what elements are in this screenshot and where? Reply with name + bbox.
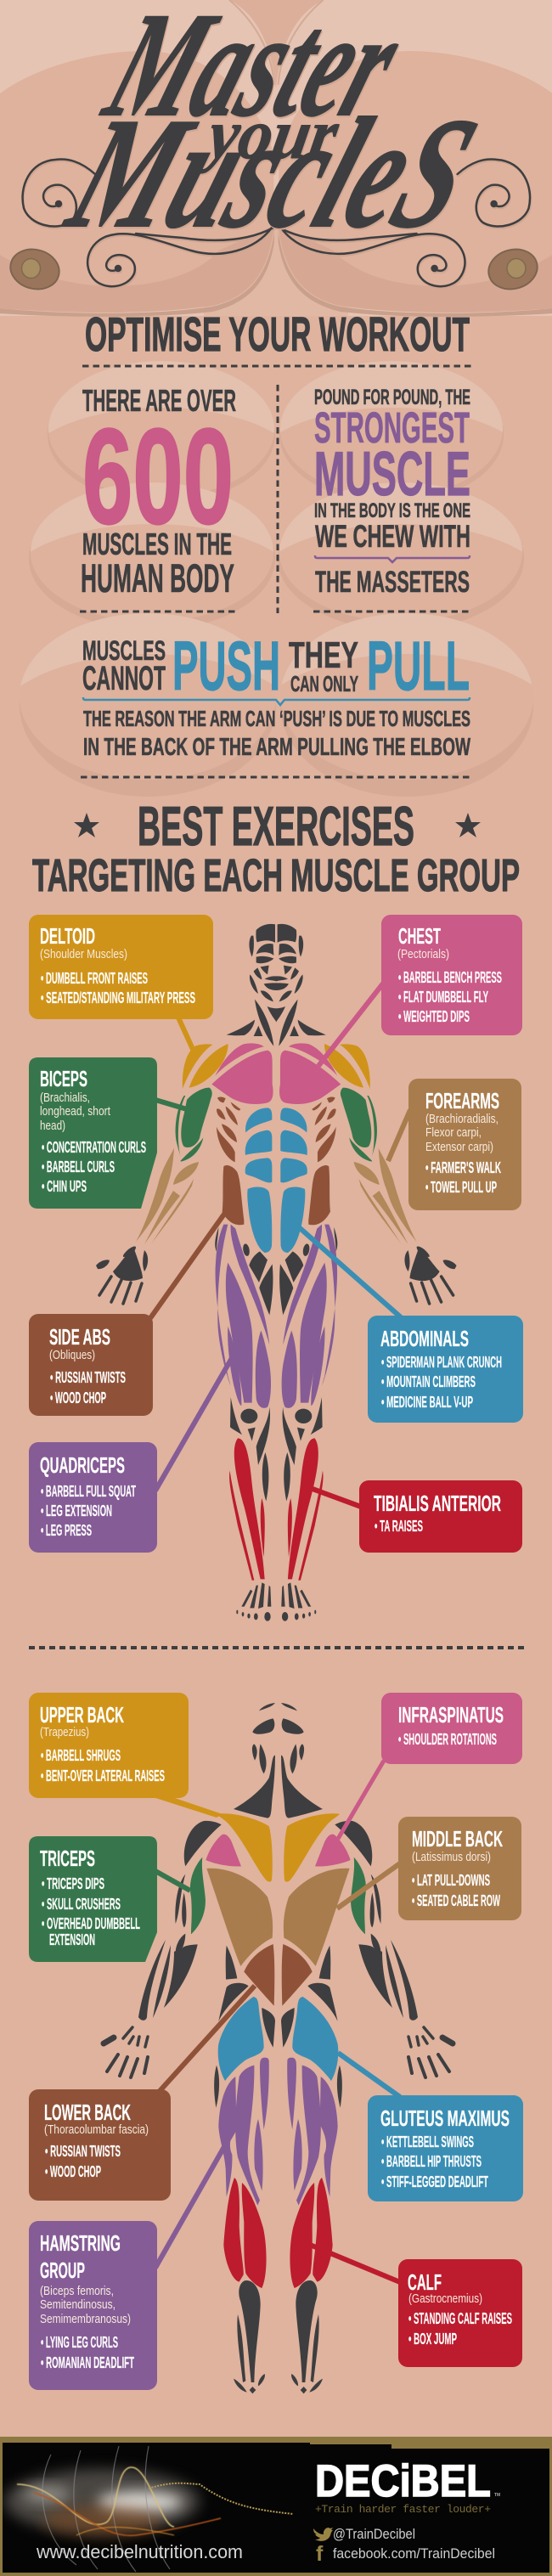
panel: deltoid: • DUMBELL FRONT RAISES (41, 970, 148, 987)
panel: biceps: longhead, short (40, 1104, 111, 1119)
fact: push and pull: CAN ONLY (290, 671, 358, 696)
panel: lower back: • RUSSIAN TWISTS (45, 2143, 121, 2160)
panel: forearms: Flexor carpi, (425, 1125, 482, 1140)
panel: chest: • WEIGHTED DIPS (398, 1008, 470, 1025)
panel: quadriceps: • LEG PRESS (41, 1522, 92, 1539)
panel: hamstring group: HAMSTRING (40, 2230, 121, 2256)
panel: upper back: (Trapezius) (40, 1725, 89, 1739)
panel: middle back (337, 1817, 521, 1920)
fact: push and pull: THEY (289, 634, 358, 676)
icon: facebook: f (316, 2542, 324, 2566)
fact: push and pull: PUSH (172, 628, 280, 705)
fact: strongest muscle (314, 386, 470, 599)
divider (29, 1646, 524, 1649)
panel: biceps (29, 1057, 187, 1209)
panel: hamstring group: Semitendinosus, (40, 2297, 115, 2312)
title (48, 0, 496, 261)
panel: chest (318, 915, 522, 1066)
chest illustration background (0, 0, 552, 317)
bubbles behind facts (0, 361, 552, 820)
panel: quadriceps: • LEG EXTENSION (41, 1502, 112, 1519)
panel: gluteus maximus: • KETTLEBELL SWINGS (381, 2134, 474, 2150)
panel: triceps: TRICEPS (40, 1846, 95, 1871)
fact: 600 muscles: 600 (82, 400, 234, 552)
icon: twitter bird (313, 2528, 333, 2541)
panel: lower back: (Thoracolumbar fascia) (44, 2122, 149, 2137)
panel: biceps: • BARBELL CURLS (42, 1158, 115, 1175)
panel: abdominals: • MOUNTAIN CLIMBERS (381, 1373, 476, 1390)
panel: biceps: BICEPS (40, 1066, 87, 1091)
panel: abdominals: • MEDICINE BALL V-UP (381, 1394, 473, 1411)
panel: deltoid: DELTOID (40, 923, 95, 949)
back body figure (104, 1703, 453, 2393)
panel: middle back: (Latissimus dorsi) (412, 1850, 491, 1864)
title: your (195, 96, 345, 174)
footer: facebook.com/TrainDecibel (333, 2545, 495, 2562)
fact: 600 muscles (81, 383, 236, 600)
fact: 600 muscles: THERE ARE OVER (82, 383, 236, 418)
panel: biceps: • CHIN UPS (42, 1178, 87, 1195)
panel: calf: CALF (408, 2269, 442, 2295)
panel: upper back: UPPER BACK (40, 1702, 124, 1728)
panel: tibialis anterior: • TA RAISES (375, 1518, 423, 1535)
footer: @TrainDecibel (333, 2526, 415, 2542)
fact: push and pull: MUSCLES (82, 635, 166, 666)
panel: hamstring group: • LYING LEG CURLS (41, 2334, 118, 2351)
panel: forearms: (Brachioradialis, (425, 1112, 498, 1126)
panel: hamstring group: GROUP (40, 2258, 85, 2283)
panel: side abs: SIDE ABS (49, 1324, 110, 1350)
fact: 600 muscles: HUMAN BODY (81, 555, 234, 600)
panel: quadriceps: QUADRICEPS (40, 1452, 125, 1478)
fact: 600 muscles: MUSCLES IN THE (82, 527, 232, 561)
panel: deltoid: (Shoulder Muscles) (40, 947, 127, 961)
fact: push and pull (82, 628, 470, 761)
panel: lower back (29, 1986, 255, 2201)
panel: triceps: • SKULL CRUSHERS (42, 1896, 121, 1913)
panel: triceps (29, 1836, 190, 1962)
icon: star left (74, 813, 99, 837)
panel: upper back: • BARBELL SHRUGS (41, 1747, 121, 1764)
panel: hamstring group (29, 2126, 236, 2390)
nipple right (484, 244, 542, 295)
panel: quadriceps (29, 1352, 235, 1553)
panel: side abs: • RUSSIAN TWISTS (50, 1369, 126, 1386)
panel: forearms: FOREARMS (425, 1088, 499, 1113)
panel: infraspinatus (338, 1693, 522, 1839)
panel: triceps: • OVERHEAD DUMBBELL (42, 1915, 140, 1932)
panel: upper back (29, 1693, 222, 1818)
footer: +Train harder faster louder+ (315, 2503, 491, 2516)
panel: chest: (Pectorials) (397, 947, 449, 961)
panel: calf: (Gastrocnemius) (408, 2291, 482, 2306)
panel: side abs: • WOOD CHOP (50, 1389, 106, 1406)
panel: calf: • BOX JUMP (408, 2331, 457, 2348)
title flourishes (23, 160, 530, 286)
icon: star right (455, 813, 481, 837)
panel: lower back: LOWER BACK (44, 2100, 131, 2125)
panel: side abs: (Obliques) (49, 1348, 95, 1362)
fact: push and pull: CANNOT (82, 660, 166, 697)
panel: chest: CHEST (398, 923, 441, 949)
panel: calf (310, 2245, 522, 2367)
panel: triceps: EXTENSION (49, 1931, 95, 1948)
panel: side abs (29, 1213, 225, 1416)
nipple left (6, 244, 64, 295)
panel: biceps: • CONCENTRATION CURLS (42, 1139, 146, 1156)
panel: deltoid: • SEATED/STANDING MILITARY PRESS (41, 989, 195, 1006)
panel: lower back: • WOOD CHOP (45, 2163, 101, 2180)
abstract sound wave art (4, 2446, 293, 2572)
footer: www.decibelnutrition.com (36, 2541, 243, 2562)
panel: triceps: • TRICEPS DIPS (42, 1875, 104, 1892)
panel: abdominals (299, 1227, 523, 1423)
panel: tibialis anterior (313, 1480, 522, 1553)
heading: best exercises (32, 795, 520, 901)
panel: forearms (388, 1079, 521, 1210)
panel: biceps: head) (40, 1119, 65, 1133)
panel: hamstring group: Semimembranosus) (40, 2312, 131, 2326)
panel: hamstring group: (Biceps femoris, (40, 2284, 114, 2298)
footer: DECiBEL (315, 2456, 491, 2506)
panel: forearms: Extensor carpi) (425, 1140, 493, 1154)
panel: deltoid (29, 915, 213, 1055)
panel: upper back: • BENT-OVER LATERAL RAISES (41, 1767, 165, 1784)
panel: quadriceps: • BARBELL FULL SQUAT (41, 1483, 136, 1500)
panel: gluteus maximus (338, 2053, 523, 2201)
panel: biceps: (Brachialis, (40, 1091, 90, 1105)
panel: abdominals: ABDOMINALS (380, 1326, 469, 1351)
fact: push and pull: PULL (367, 628, 470, 705)
panel: hamstring group: • ROMANIAN DEADLIFT (41, 2354, 134, 2371)
footer (0, 2437, 552, 2576)
front body figure (96, 924, 457, 1621)
footer: TM (494, 2493, 500, 2498)
